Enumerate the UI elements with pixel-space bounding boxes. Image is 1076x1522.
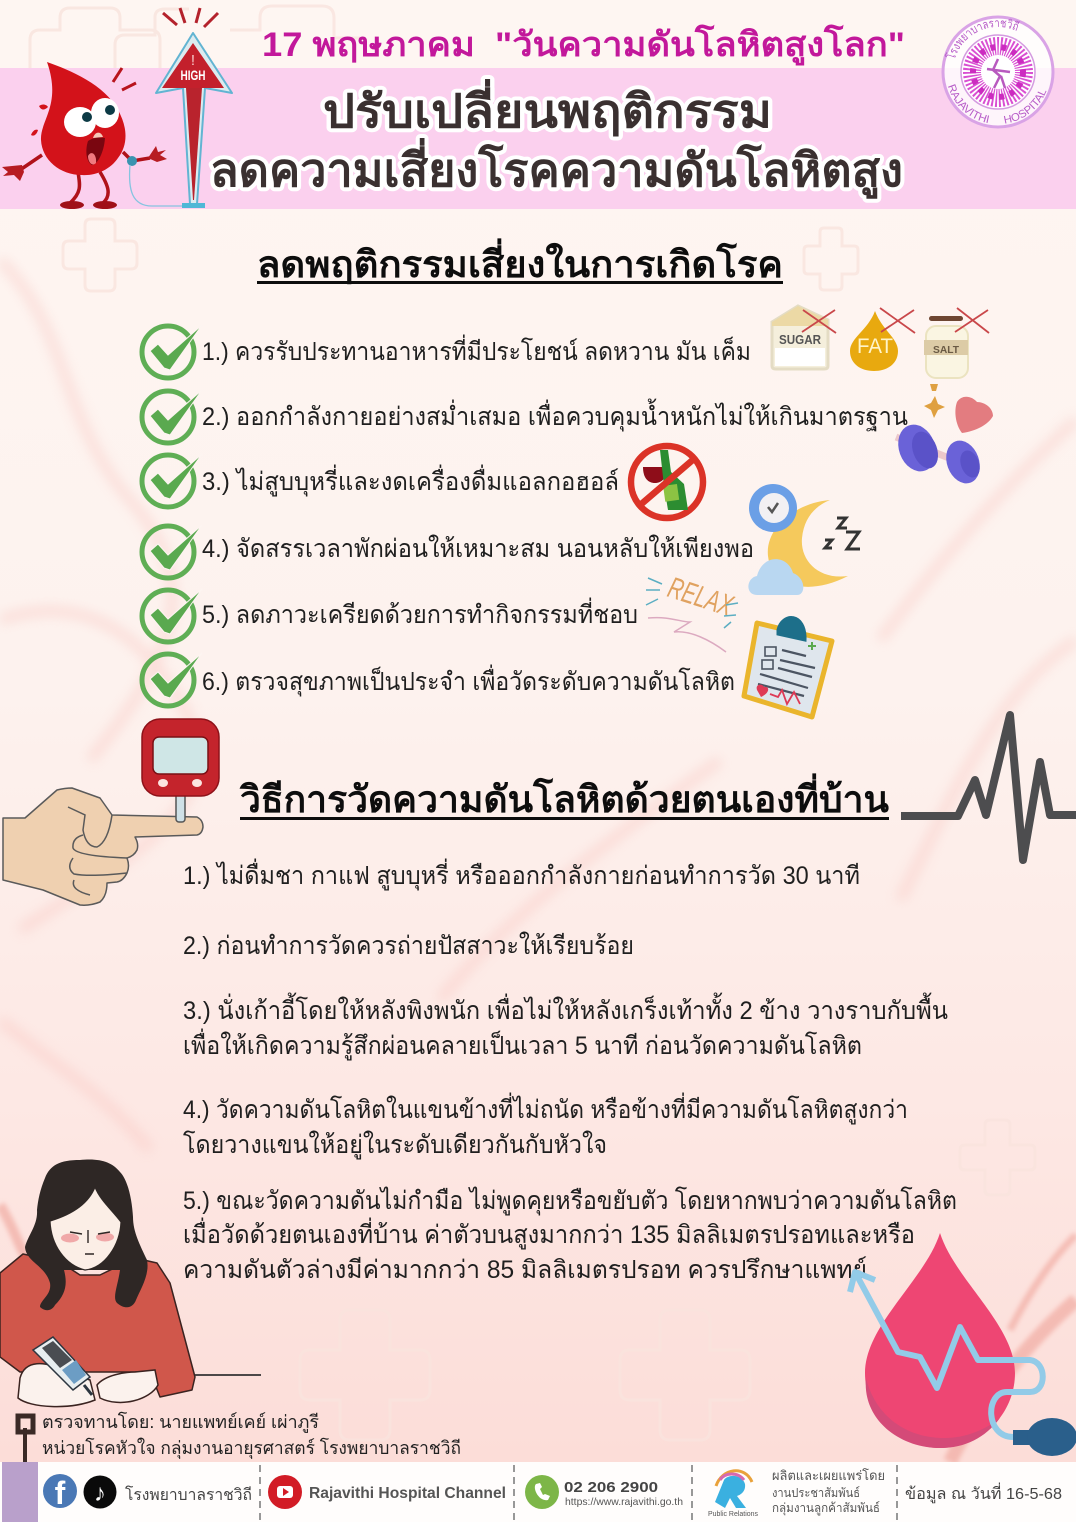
icon: sugar fat salt crossed out: SALT bbox=[933, 345, 959, 356]
checklist: risk reduction items: 2.) ออกกำลังกายอย่างสม่ำเสมอ เพื่อควบคุมน้ำหนักไม่ให้เกินมาตรฐาน bbox=[202, 398, 908, 432]
icon: high pressure gauge arrow: ! bbox=[191, 52, 195, 69]
reviewer credit: หน่วยโรคหัวใจ กลุ่มงานอายุรศาสตร์ โรงพยาบาลราชวิถี bbox=[42, 1437, 461, 1459]
icon: relax scribble bbox=[646, 571, 738, 652]
producer credit: กลุ่มงานลูกค้าสัมพันธ์ bbox=[772, 1501, 880, 1516]
reviewer credit: ตรวจทานโดย: นายแพทย์เคย์ เผ่าภูรี bbox=[42, 1411, 319, 1433]
text block: home measurement steps: 1.) ไม่ดื่มชา กาแฟ สูบบุหรี่ หรือออกกำลังกายก่อนทำการวัด 30 นาที bbox=[183, 858, 860, 891]
icon: heartbeat line bbox=[901, 715, 1076, 860]
logo: public relations: Public Relations bbox=[708, 1511, 758, 1518]
logo: Rajavithi Hospital seal: RAJAVITHI bbox=[948, 84, 989, 123]
icon: reviewer pin bbox=[18, 1416, 33, 1462]
logo: Rajavithi Hospital seal bbox=[942, 16, 1054, 128]
producer credit bbox=[772, 1468, 885, 1516]
text block: home measurement steps: เพื่อให้เกิดความรู้สึกผ่อนคลายเป็นเวลา 5 นาที ก่อนวัดความดันโลหิต bbox=[183, 1028, 862, 1061]
data date: ข้อมูล ณ วันที่ 16-5-68 bbox=[905, 1482, 1062, 1504]
logo: public relations bbox=[708, 1471, 758, 1518]
reviewer credit bbox=[42, 1411, 461, 1459]
icon: blood drop with pressure cuff bbox=[850, 1233, 1076, 1456]
main title: ปรับเปลี่ยนพฤติกรรม bbox=[323, 79, 772, 137]
text block: home measurement steps: 5.) ขณะวัดความดันไม่กำมือ ไม่พูดคุยหรือขยับตัว โดยหากพบว่าความดันโลหิต bbox=[183, 1186, 957, 1216]
youtube channel: Rajavithi Hospital Channel bbox=[309, 1485, 506, 1502]
icon: blood drop mascot bbox=[2, 62, 184, 209]
checklist: risk reduction items: 3.) ไม่สูบบุหรี่และงดเครื่องดื่มแอลกอฮอล์ bbox=[202, 464, 619, 497]
producer credit: ผลิตและเผยแพร่โดย bbox=[772, 1468, 885, 1483]
checklist: risk reduction items: 6.) ตรวจสุขภาพเป็นประจำ เพื่อวัดระดับความดันโลหิต bbox=[202, 664, 735, 697]
icon: sugar fat salt crossed out bbox=[772, 306, 989, 378]
checklist: risk reduction items: 1.) ควรรับประทานอาหารที่มีประโยชน์ ลดหวาน มัน เค็ม bbox=[202, 334, 751, 366]
icon: finger with glucose meter bbox=[3, 719, 219, 905]
icon: facebook bbox=[43, 1474, 77, 1511]
illustration: woman checking blood sugar bbox=[0, 1160, 261, 1407]
main title: ลดความเสี่ยงโรคความดันโลหิตสูง bbox=[210, 138, 903, 199]
text block: home measurement steps: โดยวางแขนให้อยู่ในระดับเดียวกันกับหัวใจ bbox=[183, 1130, 607, 1160]
text block: home measurement steps bbox=[183, 858, 957, 1284]
icon: moon clock and cloud bbox=[748, 484, 860, 595]
icon: youtube bbox=[268, 1475, 302, 1509]
text block: home measurement steps: 2.) ก่อนทำการวัดควรถ่ายปัสสาวะให้เรียบร้อย bbox=[183, 931, 634, 960]
logo: Rajavithi Hospital seal: โรงพยาบาลราชวิถี bbox=[944, 18, 1020, 58]
icon: sugar fat salt crossed out: SUGAR bbox=[779, 332, 822, 347]
producer credit: งานประชาสัมพันธ์ bbox=[772, 1486, 860, 1500]
heading: how to measure at home: วิธีการวัดความดันโลหิตด้วยตนเองที่บ้าน bbox=[239, 773, 889, 820]
icon: phone bbox=[525, 1475, 559, 1509]
text block: home measurement steps: 4.) วัดความดันโลหิตในแขนข้างที่ไม่ถนัด หรือข้างที่มีความดันโลหิตสูงกว่า bbox=[183, 1092, 908, 1125]
phone and website: 02 206 2900 bbox=[564, 1479, 658, 1496]
text block: home measurement steps: เมื่อวัดด้วยตนเองที่บ้าน ค่าตัวบนสูงมากกว่า 135 มิลลิเมตรปรอทและหรือ bbox=[183, 1217, 915, 1250]
checklist: risk reduction items bbox=[142, 325, 908, 706]
phone and website bbox=[564, 1479, 683, 1508]
icon: high pressure gauge arrow bbox=[156, 8, 232, 208]
logo: Rajavithi Hospital seal: HOSPITAL bbox=[1004, 90, 1046, 124]
facebook name: โรงพยาบาลราชวิถี bbox=[125, 1485, 252, 1504]
icon: sugar fat salt crossed out: FAT bbox=[857, 335, 893, 358]
date title: 17 พฤษภาคม "วันความดันโลหิตสูงโลก" bbox=[262, 24, 905, 66]
text block: home measurement steps: 3.) นั่งเก้าอี้โดยให้หลังพิงพนัก เพื่อไม่ให้หลังเกร็งเท้าทั้ง 2 ข้าง วางราบกับพื้น bbox=[183, 992, 948, 1025]
icon: tiktok: ♪ bbox=[94, 1480, 106, 1507]
icon: tiktok bbox=[84, 1476, 116, 1508]
text block: home measurement steps: ความดันตัวล่างมีค่ามากกว่า 85 มิลลิเมตรปรอท ควรปรึกษาแพทย์ bbox=[183, 1256, 867, 1284]
heading: reduce risk behaviours: ลดพฤติกรรมเสี่ยงในการเกิดโรค bbox=[257, 238, 783, 285]
icon: relax scribble: RELAX bbox=[664, 571, 737, 623]
footer bar bbox=[0, 1462, 1076, 1522]
icon: no alcohol bbox=[631, 446, 703, 518]
checklist: risk reduction items: 5.) ลดภาวะเครียดด้วยการทำกิจกรรมที่ชอบ bbox=[202, 597, 638, 629]
icon: facebook: f bbox=[55, 1475, 66, 1511]
icon: high pressure gauge arrow: HIGH bbox=[180, 67, 206, 83]
checklist: risk reduction items: 4.) จัดสรรเวลาพักผ่อนให้เหมาะสม นอนหลับให้เพียงพอ bbox=[202, 534, 754, 563]
main title bbox=[210, 79, 903, 199]
header band bbox=[0, 68, 1076, 209]
icon: health checkup clipboard bbox=[744, 618, 832, 717]
phone and website: https://www.rajavithi.go.th bbox=[565, 1496, 683, 1508]
icon: dumbbell and heart bbox=[892, 384, 993, 488]
